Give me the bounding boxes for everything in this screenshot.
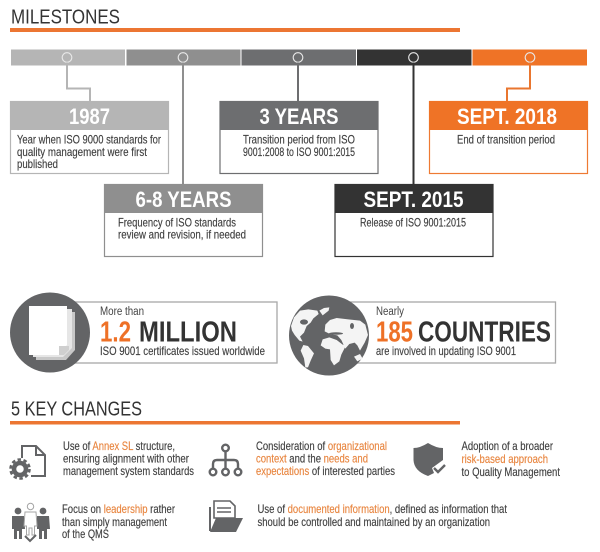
connector: 3 years — [297, 62, 299, 101]
key change: leadership — [12, 503, 175, 541]
panel: Sept. 2015 — [334, 184, 494, 256]
stat panel: 1.2 million certificates: More than — [100, 306, 144, 318]
key change: documented information — [210, 501, 508, 532]
panel: Sept. 2015: Release of ISO 9001:2015 — [360, 216, 466, 230]
icon: hierarchy — [210, 445, 241, 475]
connector: Sept. 2018 — [507, 62, 530, 101]
key change: organizational context: context and the needs and — [256, 452, 368, 466]
key change: Annex SL — [10, 440, 194, 478]
key change: Annex SL: ensuring alignment with other — [63, 452, 189, 466]
panel: 1987 — [10, 101, 169, 174]
panel: 6-8 years: review and revision, if needed — [118, 228, 246, 242]
stat panel: 1.2 million certificates: ISO 9001 certificates issued worldwide — [100, 345, 265, 358]
stat panel: 185 countries: Nearly — [376, 306, 404, 318]
connector: 1987 — [67, 62, 90, 101]
panel: 1987: quality management were first — [17, 146, 148, 159]
key change: risk-based approach: Adoption of a broader — [462, 440, 553, 453]
icon: shield with check — [414, 443, 445, 476]
key change: organizational context: expectations of interested parties — [256, 465, 395, 478]
heading: milestones: MILESTONES — [11, 6, 120, 28]
panel: 6-8 years — [104, 184, 263, 256]
panel: Sept. 2015: SEPT. 2015 — [364, 187, 464, 212]
stat panel: 1.2 million certificates: 1.2 — [100, 317, 131, 349]
key change: documented information: should be controlled and maintained by an organization — [258, 516, 490, 529]
panel: 3 years: Transition period from ISO — [243, 134, 355, 146]
panel: Sept. 2018: End of transition period — [457, 134, 555, 146]
key change: risk-based approach: risk-based approach — [462, 453, 548, 466]
icon: globe — [289, 296, 369, 376]
panel: Sept. 2018 — [429, 101, 588, 174]
panel: 3 years: 9001:2008 to ISO 9001:2015 — [243, 146, 355, 159]
key change: leadership: than simply management — [62, 516, 168, 529]
icon: folder with documents — [210, 501, 243, 532]
stat panel: 185 countries: 185 — [376, 317, 413, 349]
key change: risk-based approach: to Quality Management — [462, 466, 561, 479]
stat panel: 185 countries — [289, 296, 556, 376]
icon: stack of documents — [10, 292, 90, 372]
stat panel: 185 countries: are involved in updating ISO 9001 — [376, 345, 516, 358]
key change: organizational context — [210, 440, 395, 478]
stat panel: 1.2 million certificates — [10, 292, 277, 372]
heading: milestones — [10, 6, 460, 32]
panel: Sept. 2018: SEPT. 2018 — [457, 104, 557, 129]
key change: risk-based approach — [414, 440, 561, 479]
key change: documented information: Use of documented information, defined as information that — [258, 503, 508, 516]
heading: 5 key changes — [10, 398, 460, 424]
panel: 1987: Year when ISO 9000 standards for — [17, 134, 161, 146]
panel: 6-8 years: Frequency of ISO standards — [118, 216, 236, 230]
stat panel: 1.2 million certificates: MILLION — [139, 317, 237, 349]
key change: organizational context: Consideration of organizational — [256, 440, 387, 453]
key change: Annex SL: management system standards — [63, 465, 194, 478]
connector: Sept. 2015 — [412, 62, 414, 184]
panel: 1987: published — [17, 158, 58, 171]
panel: 1987: 1987 — [69, 104, 110, 129]
panel: 6-8 years: 6-8 YEARS — [136, 187, 232, 212]
key change: Annex SL: Use of Annex SL structure, — [63, 440, 175, 453]
stat panel: 185 countries: COUNTRIES — [418, 317, 551, 349]
heading: 5 key changes: 5 KEY CHANGES — [11, 398, 142, 421]
icon: document with gear — [10, 446, 45, 478]
connector: 6-8 years — [182, 62, 184, 184]
panel: 3 years — [220, 101, 378, 174]
key change: leadership: of the QMS — [62, 528, 109, 541]
icon: three people — [12, 503, 50, 541]
timeline bar — [11, 50, 587, 66]
panel: 3 years: 3 YEARS — [260, 104, 338, 129]
key change: leadership: Focus on leadership rather — [62, 503, 175, 516]
